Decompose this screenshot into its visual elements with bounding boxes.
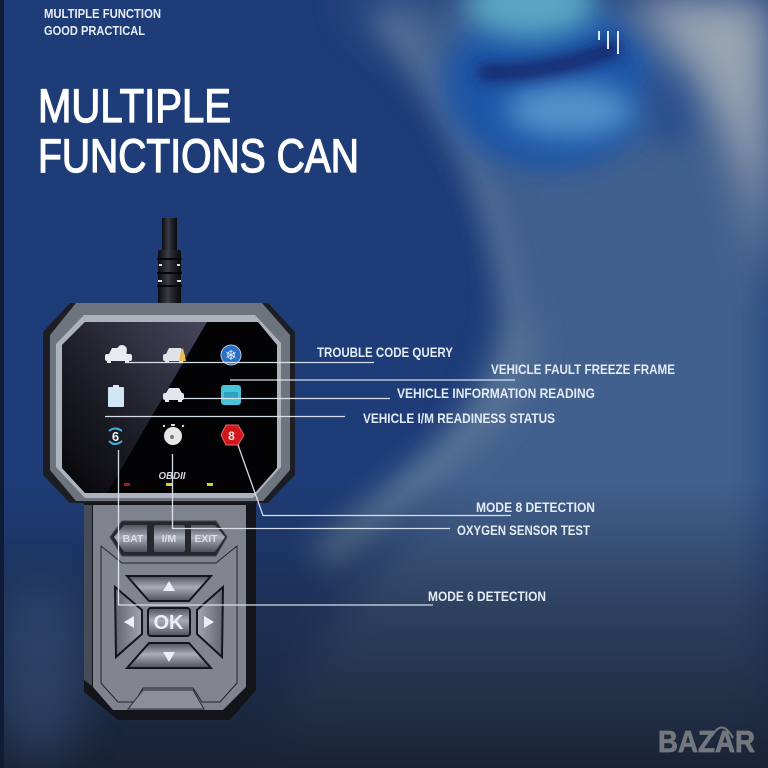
icon: mode 8	[221, 425, 244, 445]
direction keys	[115, 576, 223, 668]
callout labels: MODE 8 DETECTION	[476, 499, 595, 515]
watermark: BAZAR	[658, 724, 755, 759]
device	[43, 303, 295, 720]
title	[38, 79, 359, 182]
upper body	[43, 303, 295, 503]
icon: oxygen sensor	[163, 424, 184, 445]
callout labels: MODE 6 DETECTION	[428, 588, 546, 604]
callout labels: OXYGEN SENSOR TEST	[457, 522, 590, 538]
function buttons: I/M	[162, 533, 177, 545]
icon: mode 6: 6	[112, 429, 119, 444]
title: FUNCTIONS CAN	[38, 129, 359, 182]
small heading: MULTIPLE FUNCTION	[44, 7, 161, 21]
icon: trouble code car	[105, 345, 132, 363]
callout labels: VEHICLE FAULT FREEZE FRAME	[491, 361, 675, 377]
direction keys: OK	[154, 612, 184, 634]
icon: freeze frame	[221, 345, 241, 365]
callout labels: VEHICLE I/M READINESS STATUS	[363, 410, 555, 426]
small heading: GOOD PRACTICAL	[44, 24, 145, 38]
icon: readiness tile	[221, 385, 241, 405]
function buttons: EXIT	[194, 533, 218, 545]
obdii label: OBDII	[158, 471, 186, 482]
function buttons	[110, 521, 227, 556]
icon: mode 8: 8	[228, 429, 235, 443]
icon: mode 6	[109, 428, 122, 444]
lower body	[84, 500, 256, 720]
function buttons: BAT	[123, 533, 144, 545]
title: MULTIPLE	[38, 79, 231, 132]
callout lines	[105, 362, 515, 605]
icon: info car	[163, 388, 184, 402]
callout labels: TROUBLE CODE QUERY	[317, 344, 454, 360]
callout labels: VEHICLE INFORMATION READING	[397, 385, 595, 401]
small heading	[44, 7, 161, 38]
icon: three bars	[598, 31, 619, 54]
icon: clipboard	[108, 385, 124, 407]
icon: fault car	[163, 348, 186, 363]
status lights	[124, 483, 213, 486]
cable	[157, 218, 182, 304]
screen	[62, 322, 277, 493]
icon: freeze frame: ❄	[225, 347, 237, 363]
callout labels	[317, 344, 675, 604]
